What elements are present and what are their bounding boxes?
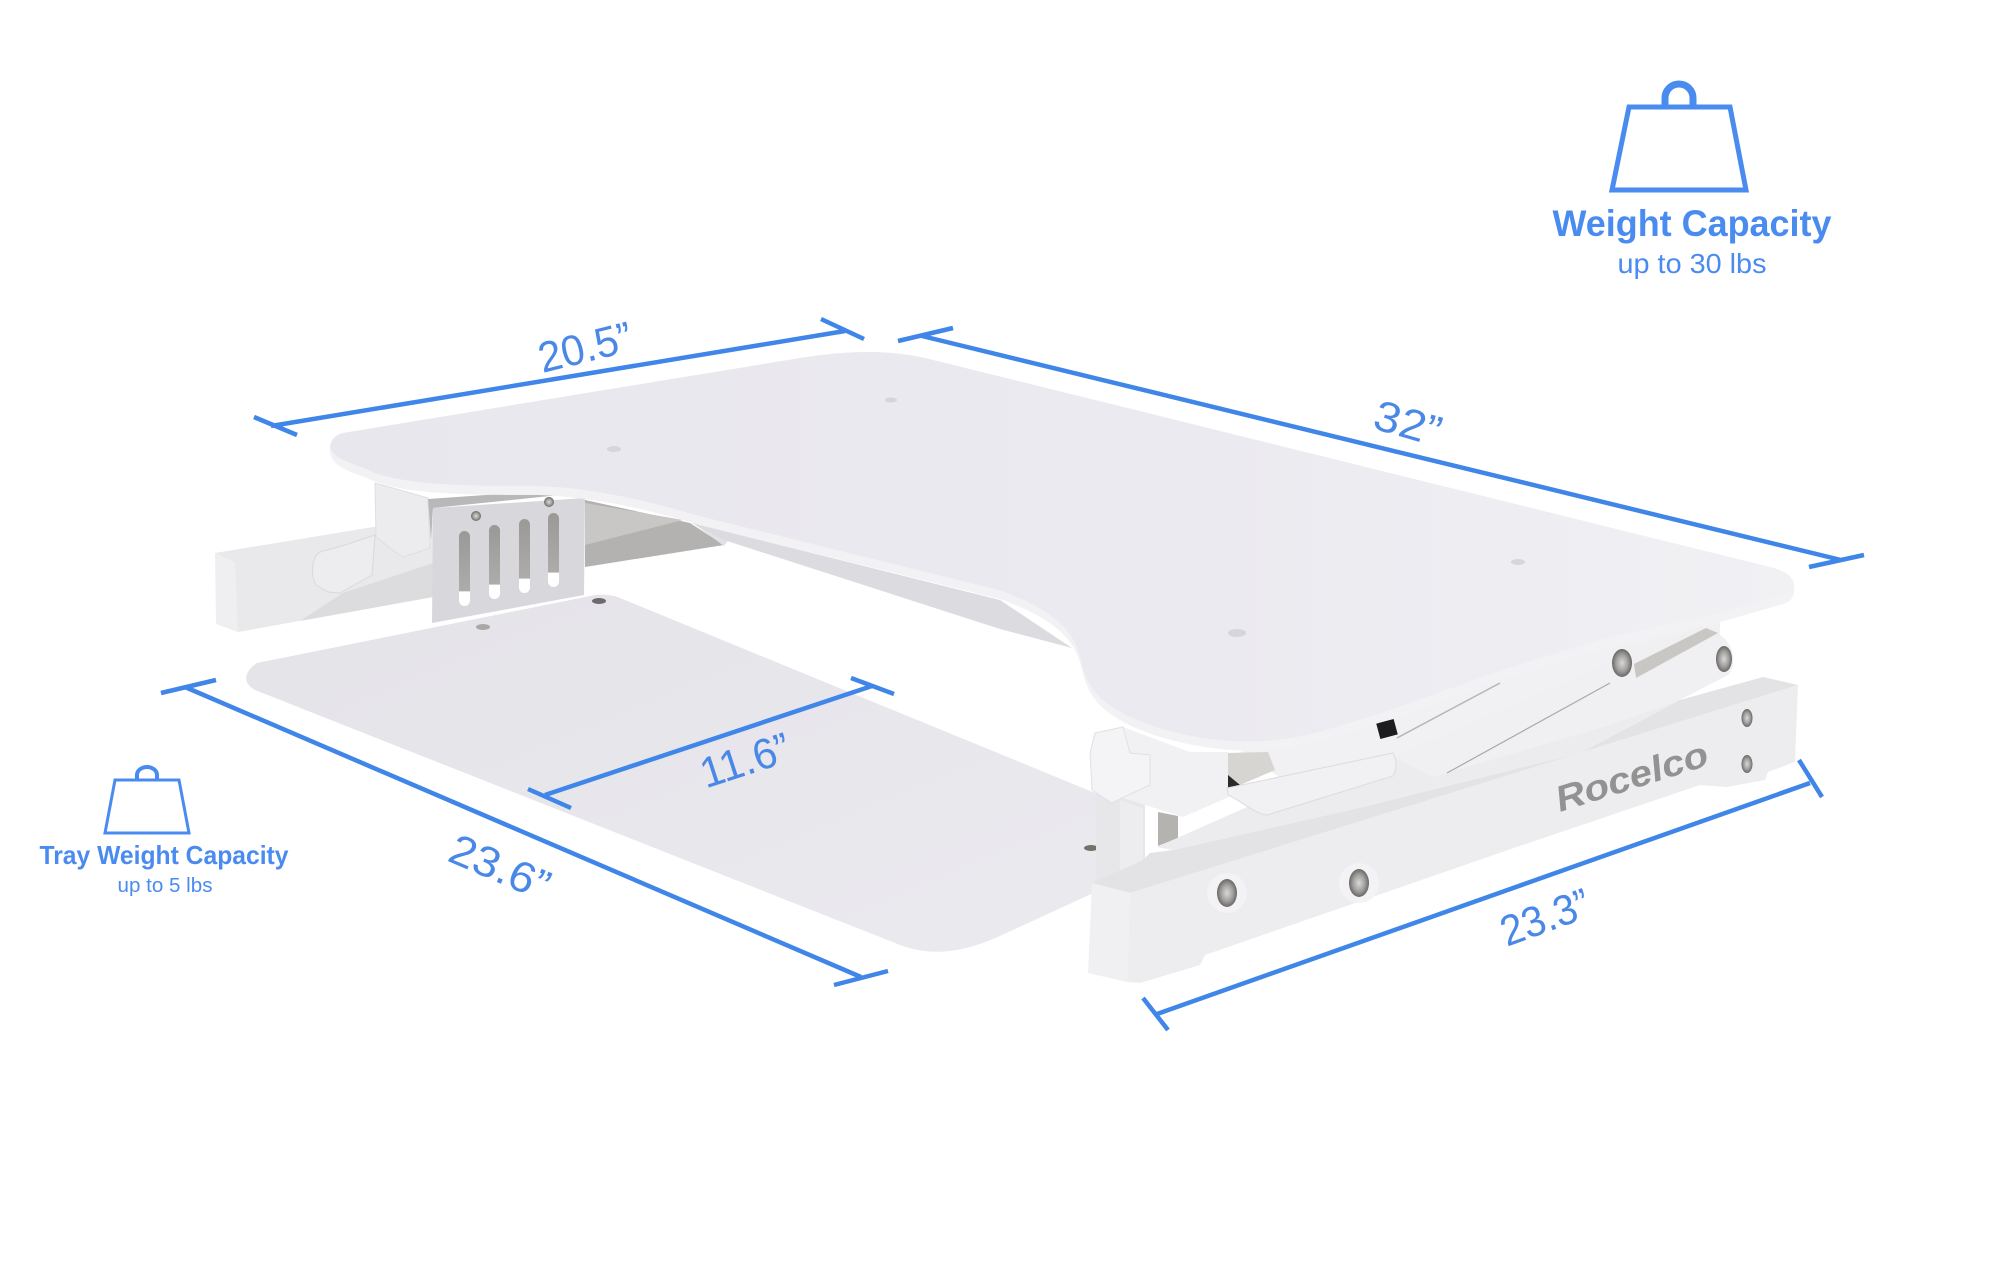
callout: tray weight capacity: [40, 767, 289, 897]
icon: small weight: [105, 767, 189, 833]
icon: weight: [1612, 84, 1746, 190]
brand name: Rocelco: [1550, 733, 1713, 820]
front base bar: [1088, 677, 1798, 983]
dimension: desk depth 20.5 in: 20.5”: [533, 313, 637, 383]
chrome strip: [428, 494, 560, 540]
text: up to 30 lbs: up to 30 lbs: [1618, 248, 1766, 279]
release handle: [1227, 753, 1396, 815]
dimension: desk width 32 in: [898, 328, 1864, 567]
dimension: base width 23.3 in: [1143, 760, 1822, 1030]
desktop surface: [329, 343, 1794, 750]
front clamp and knob: [1090, 727, 1396, 817]
rear knob: [313, 535, 375, 593]
heading: weight capacity: Weight Capacity: [1552, 203, 1832, 244]
heading: tray weight capacity: Tray Weight Capacity: [40, 840, 289, 870]
tray support riser: [1096, 790, 1178, 892]
dimension: desk depth 20.5 in: [254, 313, 864, 435]
keyboard tray: [246, 595, 1100, 952]
rear clamp block: [375, 483, 430, 557]
dimension: tray depth 11.6 in: [528, 678, 894, 808]
callout: weight capacity: [1552, 84, 1832, 279]
dimension: tray depth 11.6 in: 11.6”: [694, 724, 796, 798]
slotted metal plate: [432, 497, 585, 623]
dimension: tray width 23.6 in: [161, 680, 888, 985]
under-desk rail: [692, 523, 1072, 648]
dimension: desk width 32 in: 32”: [1368, 392, 1447, 456]
dimension: base width 23.3 in: 23.3”: [1494, 880, 1597, 956]
scissor lift arms: [1157, 615, 1733, 850]
text: up to 5 lbs: up to 5 lbs: [118, 875, 212, 897]
product: white sit-stand desk riser: [215, 343, 1798, 983]
dimension: tray width 23.6 in: 23.6”: [442, 825, 557, 911]
rear base bar: [215, 500, 730, 632]
